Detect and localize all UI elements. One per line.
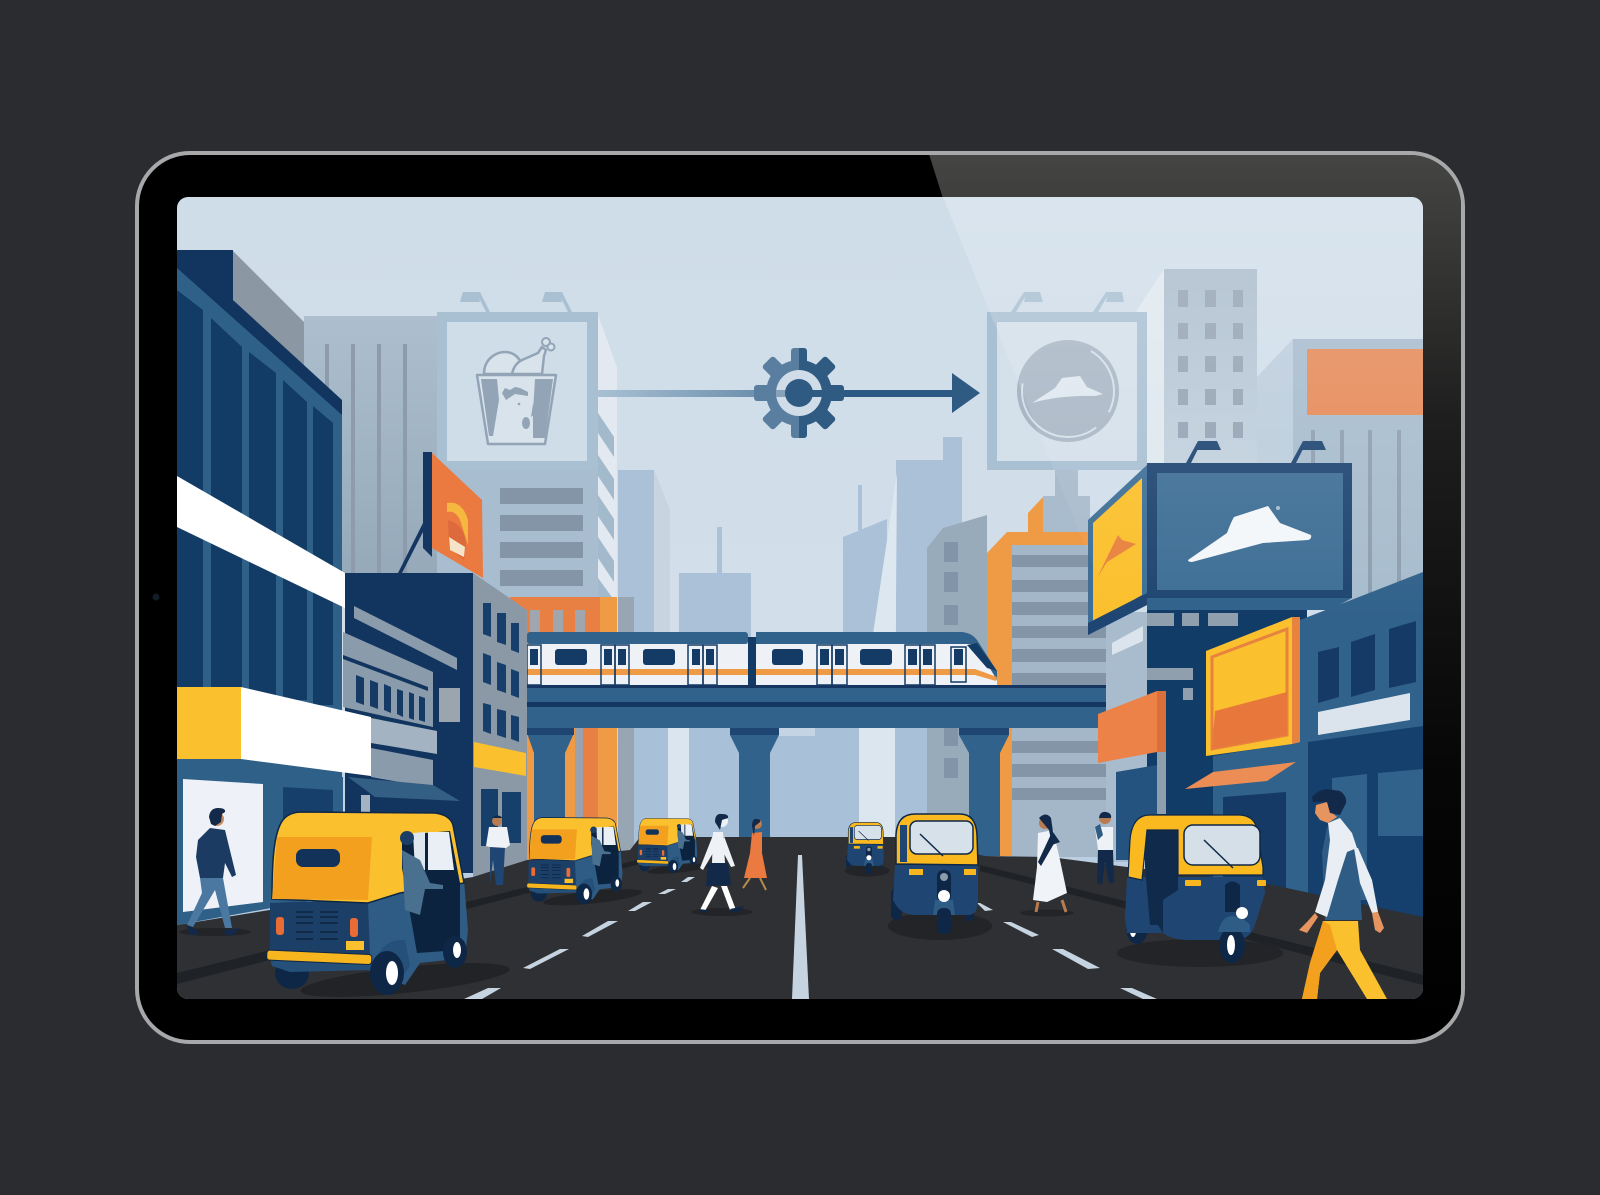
- lane dashes: [464, 877, 1157, 999]
- yellow angled side billboard: [1088, 465, 1147, 635]
- kerbs: [177, 860, 1423, 985]
- pedestrian: woman in white sari: [1020, 814, 1074, 916]
- large left navy building: [177, 250, 371, 790]
- screen illustration: [177, 197, 1423, 1004]
- billboard lamps: [460, 292, 572, 312]
- glass reflection: [943, 197, 1423, 620]
- orange awning: [1185, 762, 1296, 789]
- pedestrian: man crossing: [691, 814, 753, 916]
- orange roof-mounted sign: [398, 452, 483, 578]
- pizza-style billboard: [987, 292, 1147, 500]
- pedestrian: large man in foreground: [1299, 789, 1387, 999]
- billboard lamps: [1011, 292, 1124, 312]
- grey corner building with windows: [473, 573, 527, 877]
- grey background building left: [304, 316, 437, 586]
- yellow and orange shop sign: [1206, 617, 1300, 756]
- billboard lamps: [1186, 441, 1326, 463]
- rickshaw rear medium: [527, 818, 643, 909]
- icon: gear: [754, 348, 844, 438]
- distant front rickshaw: [845, 822, 890, 877]
- large dark billboard with white logo: [1147, 441, 1352, 598]
- carriage two with nose: [756, 632, 997, 685]
- rickshaw rear large: [267, 812, 511, 1004]
- distant skyline: [618, 437, 962, 853]
- process arrow line: [598, 373, 980, 413]
- illustration: tablet showing a city street: [135, 151, 1465, 1044]
- KFC-style billboard: [437, 292, 598, 470]
- orange hanging sign: [1098, 691, 1166, 814]
- white facade band: [177, 476, 345, 608]
- metro train: [527, 632, 997, 685]
- rickshaw three-quarter right: [1117, 815, 1283, 967]
- pedestrian: woman in orange dress: [743, 819, 767, 890]
- tablet device frame: [135, 151, 1465, 1044]
- awning: [348, 777, 460, 801]
- pale tower with windows: [1137, 269, 1257, 470]
- road: [177, 837, 1423, 999]
- left near navy mid building: [343, 573, 473, 873]
- right navy block: [1106, 598, 1352, 898]
- carriage one: [527, 632, 748, 685]
- centre-right high-rise: [987, 496, 1106, 857]
- pedestrian: man on left pavement: [486, 816, 510, 885]
- pedestrian: man on phone: [1095, 812, 1114, 885]
- elevated metro bridge: [527, 685, 1106, 856]
- yellow and white fascia: [177, 687, 241, 759]
- right blue shop building: [1213, 572, 1423, 920]
- far right building with orange sign: [1257, 339, 1423, 609]
- sky: [177, 197, 1423, 999]
- road centre line: [792, 855, 809, 999]
- arrow head: [952, 373, 980, 413]
- icon: chicken bucket: [477, 338, 556, 444]
- small far rickshaw rear: [637, 818, 710, 876]
- building under KFC billboard: [437, 315, 617, 621]
- rickshaw front centre: [888, 814, 992, 940]
- orange mid building behind bridge: [510, 597, 634, 867]
- grey mid-distance tower: [927, 515, 987, 816]
- left storefront: [177, 762, 343, 925]
- pedestrian: man at storefront: [179, 808, 251, 936]
- icon: circular pizza roof logo: [1017, 340, 1119, 442]
